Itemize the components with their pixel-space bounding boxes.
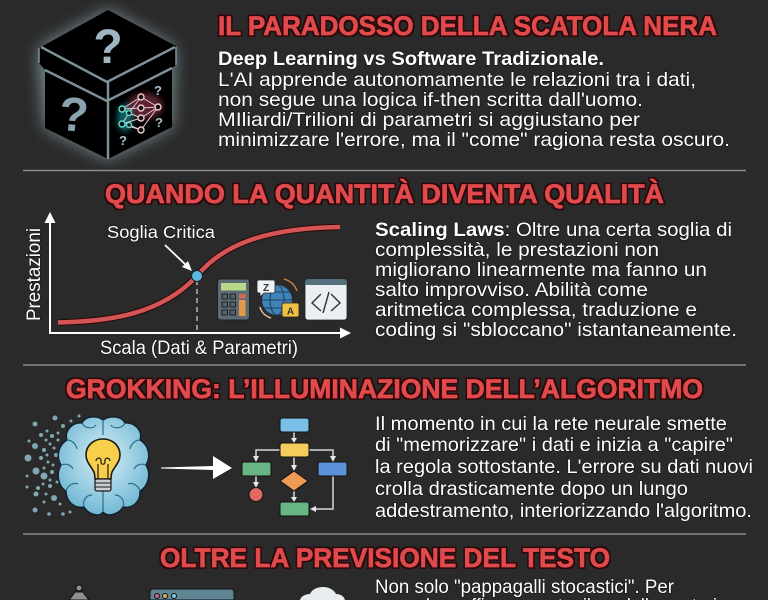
heading: grokking: GROKKING: L’ILLUMINAZIONE DELL’ALGORITMO [66,374,703,404]
text block: black box explanation: non segue una logica if-then scritta dall'uomo. [218,89,643,111]
text block: grokking explanation: crolla drasticamente dopo un lungo [375,478,688,500]
text block: grokking explanation: Il momento in cui la rete neurale smette [375,413,727,435]
text block: black box explanation: Deep Learning vs Software Tradizionale. [218,48,604,70]
icon: neural network: ? [155,115,163,130]
text block: scaling laws: salto improvviso. Abilità come [375,279,648,301]
heading: black box paradox: IL PARADOSSO DELLA SCATOLA NERA [218,11,717,41]
text block: scaling laws: Scaling Laws : Oltre una certa soglia di [375,219,732,241]
icon: neural network: ? [119,133,127,148]
icon: neural network [117,83,163,148]
text block: scaling laws [375,219,737,341]
text block: beyond stochastic parrots: Non solo "pappagalli stocastici". Per [375,576,674,598]
icon: black box with question marks: ? [93,21,123,74]
icon: black box with question marks [39,10,176,159]
chart: scaling S-curve [23,212,351,359]
icon: translation globe [257,279,299,318]
text block: grokking explanation: la regola sottostante. L'errore su dati nuovi [375,456,753,478]
icon: cloud [300,587,345,600]
label: critical threshold: Soglia Critica [107,222,215,242]
icon: code window [305,279,347,320]
particles dissolving into the brain [24,414,80,516]
text block: black box explanation [218,48,730,151]
text block: grokking explanation: di "memorizzare" i dati e inizia a "capire" [375,434,733,456]
icon: black box with question marks: ? [57,88,91,143]
text block: scaling laws: coding si "sbloccano" istantaneamente. [375,319,737,341]
text block: scaling laws: migliorano linearmente ma fanno un [375,259,707,281]
text block: black box explanation: minimizzare l'errore, ma il "come" ragiona resta oscuro. [218,129,730,151]
heading: beyond text prediction: OLTRE LA PREVISIONE DEL TESTO [160,543,610,573]
heading: quantity becomes quality: QUANDO LA QUANTITÀ DIVENTA QUALITÀ [105,179,664,209]
text block: black box explanation: MIliardi/Trilioni di parametri si aggiustano per [218,109,641,131]
icon: chess piece [69,585,89,600]
text block: grokking explanation: addestramento, interiorizzando l'algoritmo. [375,500,752,522]
diagram: algorithm flowchart [242,418,347,516]
axis label: scale: Scala (Dati & Parametri) [100,337,298,359]
text block: scaling laws: complessità, le prestazioni non [375,239,659,261]
icon: calculator [218,279,250,320]
icon: translation globe: A [287,306,294,318]
icon: browser window [150,589,234,600]
axis label: performance: Prestazioni [23,228,45,321]
icon: neural network: ? [154,83,162,98]
text block: scaling laws: aritmetica complessa, traduzione e [375,299,697,321]
text block: black box explanation: L'AI apprende autonomamente le relazioni tra i dati, [218,69,696,91]
marker: threshold point [192,270,202,282]
arrow: threshold pointer [165,245,192,271]
arrow: brain to algorithm [161,456,232,479]
icon: brain with light bulb and particles [24,414,149,516]
icon: translation globe: Z [263,283,269,294]
light bulb [86,439,120,491]
text block: grokking explanation [375,413,753,522]
